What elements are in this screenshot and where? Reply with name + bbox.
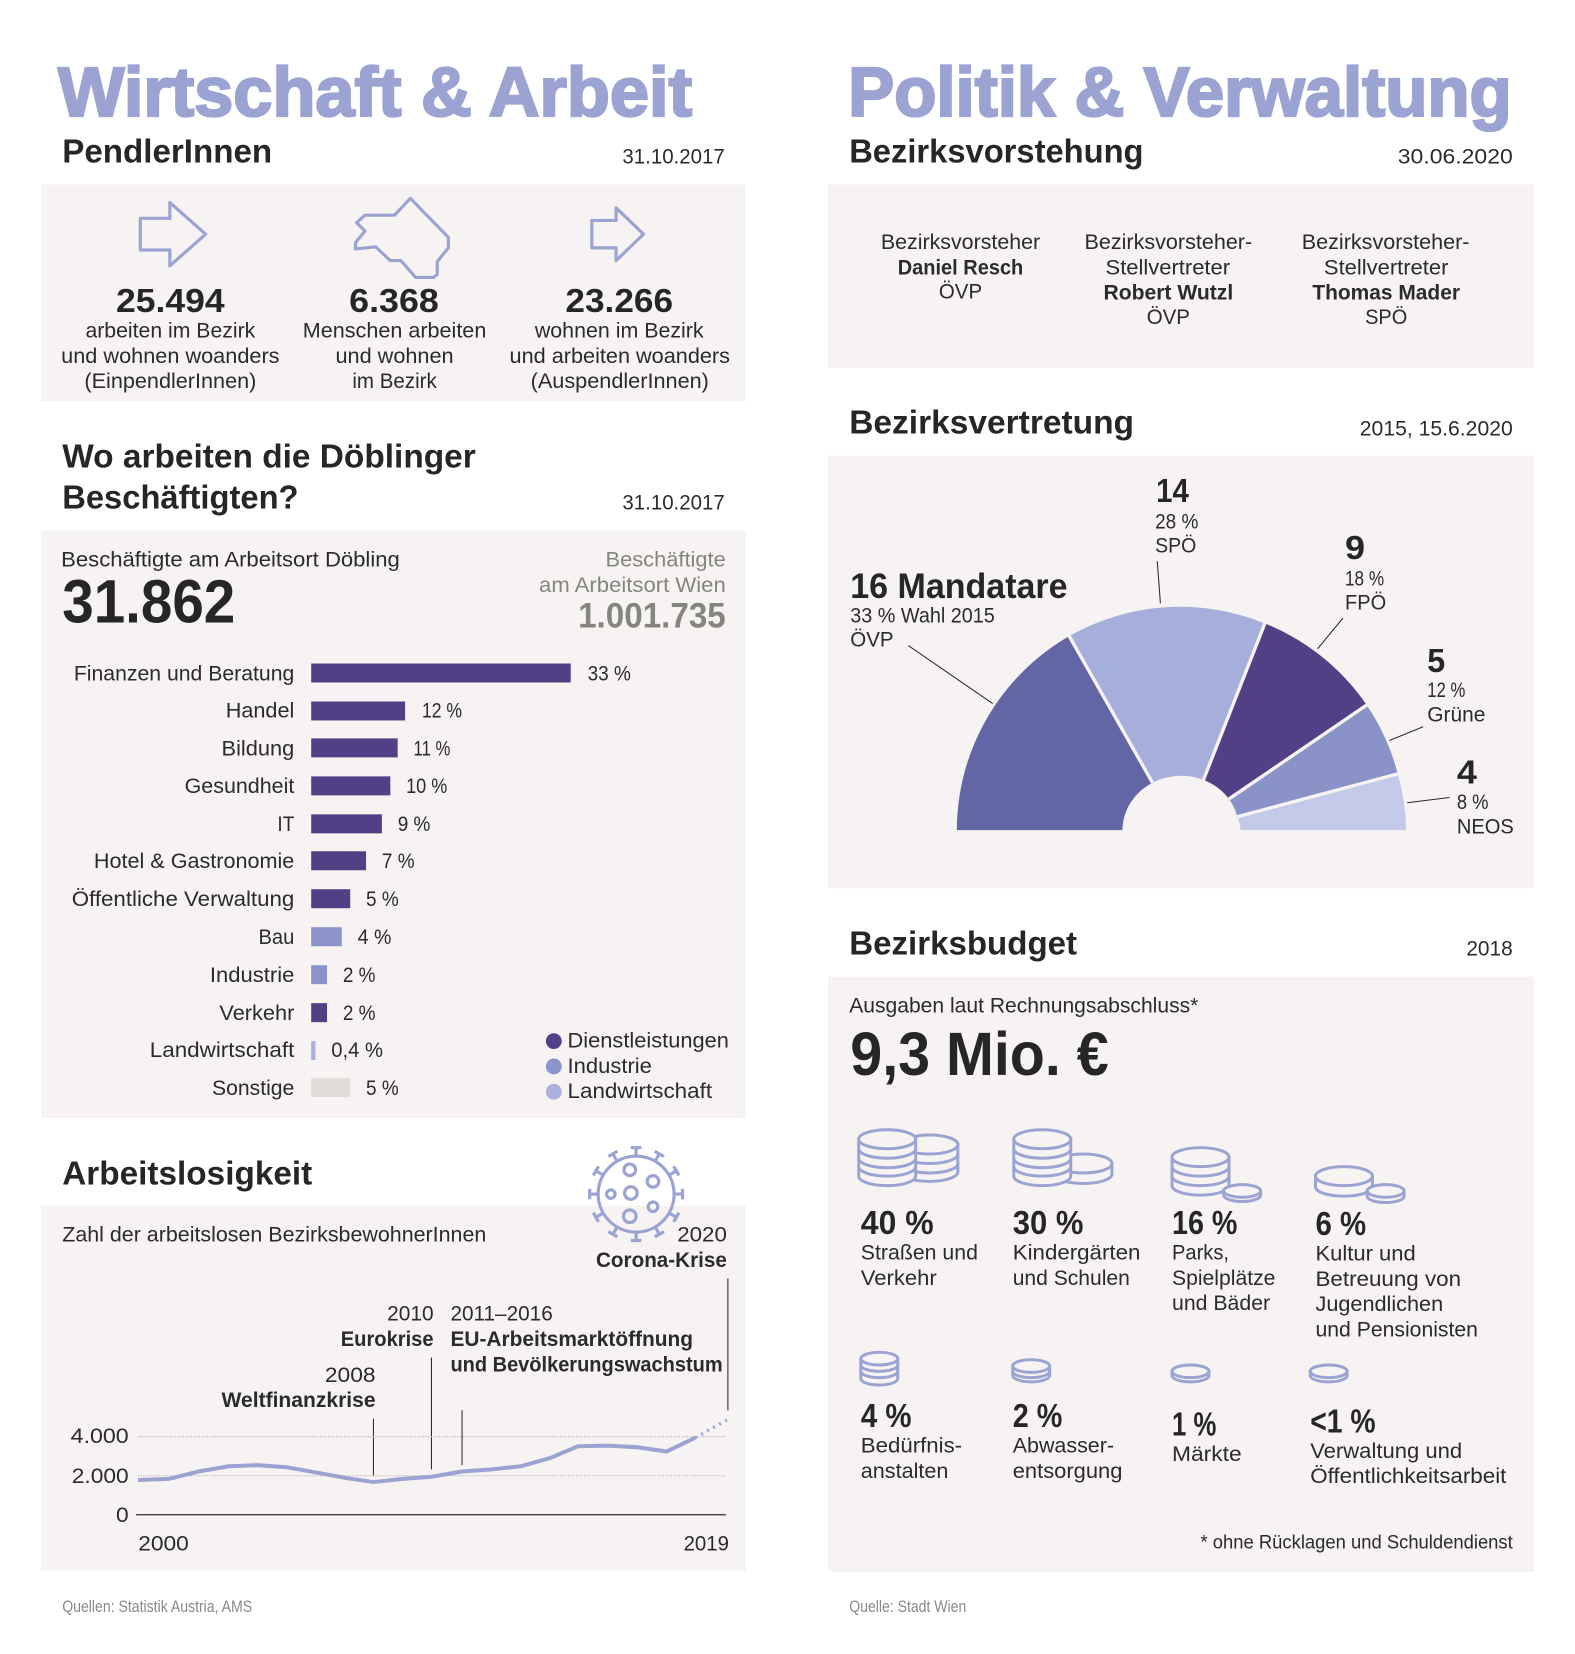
person: Daniel Resch: Daniel Resch [898,254,1023,279]
date: Beschäftigte: 31.10.2017 [622,489,725,514]
stat: Einpendler: arbeiten im Bezirk [85,318,255,343]
source: left: Quellen: Statistik Austria, AMS [62,1597,252,1616]
person: Thomas Mader: Thomas Mader [1312,280,1461,305]
item: 1%: Märkte [1172,1441,1242,1466]
item: 6% [1315,1167,1478,1341]
label: NEOS: NEOS [1457,813,1514,838]
item: 16%: Spielplätze [1172,1265,1275,1290]
source: right: Quelle: Stadt Wien [849,1597,966,1616]
panel: Arbeitslosigkeit [41,1206,746,1571]
bar chart: Branchen: 0,4 % [331,1037,383,1062]
annotation: Weltfinanzkrise: 2008 [325,1362,376,1387]
line chart: Arbeitslose: 2019 [684,1531,729,1556]
stat: im Bezirk: Menschen arbeiten [303,318,486,343]
label: FPÖ [1318,529,1386,649]
panel: Beschäftigte [41,531,746,1118]
date: Bezirksvertretung: 2015, 15.6.2020 [1360,416,1513,441]
label: FPÖ: 9 [1345,529,1365,567]
bar chart: Branchen: 11 % [414,735,450,760]
bar chart: Branchen: Verkehr [219,1000,294,1025]
person: Daniel Resch [881,229,1040,304]
label: ÖVP: 16 Mandatare [850,567,1068,606]
line chart: Arbeitslose: 4.000 [71,1423,129,1448]
icon: district outline [356,198,448,277]
item: 30%: und Schulen [1013,1265,1130,1290]
title: Wirtschaft & Arbeit: Wirtschaft & Arbeit [58,53,692,131]
title: Politik & Verwaltung: Politik & Verwaltung [848,53,1512,131]
heading: Bezirksvorstehung: Bezirksvorstehung [849,132,1144,170]
item: <1%: Verwaltung und [1310,1438,1462,1463]
stat: Einpendler [61,282,280,393]
item: 6%: Jugendlichen [1315,1291,1443,1316]
legend: Dienstleistungen [568,1027,729,1052]
annotation: EU-Arbeitsmarktöffnung: und Bevölkerungswachstum [450,1351,723,1376]
text: Ausgaben: Ausgaben laut Rechnungsabschluss* [849,993,1199,1018]
item: 4% [861,1352,962,1483]
icon: arrow into district [140,203,206,266]
item: 16%: und Bäder [1172,1290,1270,1315]
text: Ausgaben [849,993,1199,1088]
item: 4%: anstalten [861,1458,948,1483]
panel: Bezirksbudget [828,977,1534,1572]
item: <1%: Öffentlichkeitsarbeit [1310,1463,1506,1488]
legend: Industrie [568,1053,652,1078]
panel: PendlerInnen [41,185,746,401]
text: Beschäftigte Wien: Beschäftigte [606,546,726,571]
item: 2%: 2 % [1013,1397,1062,1435]
label: NEOS [1407,754,1514,838]
label: Grüne: 5 [1427,642,1445,680]
item: 30%: 30 % [1013,1204,1083,1242]
annotation: Corona: 2020 [677,1222,727,1247]
item: 30% [1013,1130,1140,1290]
label: NEOS: 4 [1457,754,1477,792]
heading: Wo arbeiten die Döblinger Beschäftigten?: Beschäftigten? [62,478,299,516]
label: SPÖ [1155,472,1198,603]
stat: im Bezirk: und wohnen [335,343,454,368]
person: Robert Wutzl: Stellvertreter [1106,254,1230,279]
item: <1% [1310,1365,1506,1488]
stat: Auspendler: 23.266 [565,282,673,320]
line chart: Arbeitslose: 2000 [138,1531,189,1556]
date: PendlerInnen: 31.10.2017 [622,144,725,169]
annotation: EU-Arbeitsmarktöffnung [450,1301,723,1465]
bar chart: Branchen: Finanzen und Beratung [74,660,294,685]
label: Grüne [1389,642,1485,741]
person: Thomas Mader [1302,229,1470,329]
line chart: Arbeitslose [71,1419,729,1556]
bar chart: Branchen: Bau [258,924,294,949]
label: FPÖ: 18 % [1345,565,1384,590]
item: 2% [1013,1360,1122,1483]
annotation: Corona: Corona-Krise [596,1247,727,1272]
bar chart: Branchen: Landwirtschaft [150,1037,294,1062]
item: 16% [1172,1148,1275,1315]
bar chart: Branchen: 2 % [343,1000,376,1025]
annotation: Weltfinanzkrise: Weltfinanzkrise [222,1387,376,1412]
heading: Bezirksvertretung: Bezirksvertretung [849,404,1134,442]
item: <1%: <1 % [1310,1402,1376,1440]
bar chart: Branchen: 5 % [366,886,399,911]
label: SPÖ: 28 % [1155,508,1198,533]
stat: Einpendler: und wohnen woanders [61,343,280,368]
stat: Auspendler [510,282,730,393]
stat: Einpendler: (EinpendlerInnen) [84,368,256,393]
bar chart: Branchen: Industrie [210,962,294,987]
stat: Einpendler: 25.494 [116,282,225,320]
label: NEOS: 8 % [1457,789,1488,814]
person: Robert Wutzl: Bezirksvorsteher- [1084,229,1252,254]
item: 2%: Abwasser- [1013,1433,1114,1458]
person: Daniel Resch: ÖVP [939,279,982,304]
bar chart: Branchen: IT [277,811,294,836]
stat: im Bezirk [303,282,486,393]
item: 6%: und Pensionisten [1315,1316,1478,1341]
legend [546,1027,729,1103]
bar chart: Branchen: 33 % [588,660,631,685]
icon: virus [590,1148,683,1240]
bar chart: Branchen: Öffentliche Verwaltung [72,886,294,911]
stat: im Bezirk: 6.368 [349,282,439,320]
text: Beschäftigte Wien: am Arbeitsort Wien [539,572,726,597]
annotation: Corona [596,1222,728,1410]
bar chart: Branchen: 9 % [398,811,430,836]
date: Bezirksbudget: 2018 [1466,936,1513,961]
line chart: Arbeitslose: 2.000 [72,1463,129,1488]
heading: Bezirksbudget: Bezirksbudget [849,925,1077,963]
person: Robert Wutzl: Robert Wutzl [1103,280,1233,305]
item: 1% [1172,1365,1242,1466]
item: 30%: Kindergärten [1013,1239,1140,1264]
stat: Auspendler: wohnen im Bezirk [534,318,704,343]
date: Bezirksvorstehung: 30.06.2020 [1398,144,1513,169]
bar chart: Branchen: Sonstige [212,1075,294,1100]
bar chart: Branchen: 12 % [422,697,462,722]
person: Thomas Mader: SPÖ [1365,304,1407,329]
bar chart: Branchen: 7 % [382,848,415,873]
item: 4%: Bedürfnis- [861,1433,962,1458]
bar chart: Branchen [72,660,631,1100]
text: Beschäftigte Döbling: 31.862 [62,567,235,635]
bar chart: Branchen: Gesundheit [185,773,294,798]
heading: Arbeitslosigkeit: Arbeitslosigkeit [62,1155,312,1193]
annotation: Weltfinanzkrise [222,1362,376,1476]
text: Beschäftigte Wien: 1.001.735 [578,597,726,636]
label: SPÖ: 14 [1156,472,1189,510]
heading: PendlerInnen: PendlerInnen [62,132,272,170]
label: Grüne: 12 % [1427,677,1465,702]
stat: Auspendler: und arbeiten woanders [510,343,730,368]
person: Robert Wutzl [1084,229,1252,329]
item: 6%: 6 % [1315,1205,1366,1243]
bar chart: Branchen: 5 % [366,1075,399,1100]
text: Beschäftigte Wien [539,546,726,636]
item: 40% [859,1130,978,1290]
label: ÖVP: 33 % Wahl 2015 [850,602,995,627]
item: 6%: Kultur und [1315,1241,1416,1266]
stat: Auspendler: (AuspendlerInnen) [531,368,709,393]
annotation: EU-Arbeitsmarktöffnung: EU-Arbeitsmarktöffnung [450,1326,693,1351]
bar chart: Branchen: Hotel & Gastronomie [94,848,294,873]
item: 2%: entsorgung [1013,1458,1122,1483]
item: 40%: Straßen und [861,1239,978,1264]
person: Robert Wutzl: ÖVP [1147,304,1190,329]
stat: im Bezirk: im Bezirk [352,368,437,393]
text: Ausgaben: 9,3 Mio. € [850,1020,1109,1088]
heading: Wo arbeiten die Döblinger Beschäftigten? [62,437,476,516]
icon: arrow out of district [592,208,644,261]
line chart: Arbeitslose: 0 [116,1502,129,1527]
text: Beschäftigte Döbling [61,546,400,635]
item: 40%: Verkehr [861,1265,937,1290]
bar chart: Branchen: 2 % [343,962,376,987]
legend: Landwirtschaft [568,1078,712,1103]
subtitle: Zahl der arbeitslosen BezirksbewohnerInnen [62,1222,486,1247]
panel: Bezirksvorstehung [828,185,1534,368]
annotation: EU-Arbeitsmarktöffnung: 2011–2016 [450,1301,553,1326]
label: SPÖ: SPÖ [1155,533,1196,558]
footnote: * ohne Rücklagen und Schuldendienst [1201,1533,1513,1554]
heading: Wo arbeiten die Döblinger Beschäftigten?: Wo arbeiten die Döblinger [62,437,476,475]
label: ÖVP [850,567,1068,704]
item: 40%: 40 % [861,1204,934,1242]
bar chart: Branchen: 10 % [406,773,447,798]
item: 16%: Parks, [1172,1239,1229,1264]
person: Thomas Mader: Bezirksvorsteher- [1302,229,1470,254]
label: Grüne: Grüne [1427,702,1485,727]
bar chart: Branchen: 4 % [358,924,391,949]
label: ÖVP: ÖVP [850,627,894,652]
chart: semicircle seats [957,607,1406,830]
item: 6%: Betreuung von [1315,1266,1461,1291]
bar chart: Branchen: Bildung [222,735,294,760]
annotation: Eurokrise: Eurokrise [341,1326,434,1351]
person: Thomas Mader: Stellvertreter [1324,254,1448,279]
item: 1%: 1 % [1172,1406,1216,1444]
bar chart: Branchen: Handel [226,697,294,722]
item: 4%: 4 % [861,1397,911,1435]
annotation: Eurokrise [341,1301,434,1469]
person: Daniel Resch: Bezirksvorsteher [881,229,1040,254]
label: FPÖ: FPÖ [1345,590,1386,615]
text: Beschäftigte Döbling: Beschäftigte am Arbeitsort Döbling [61,546,400,571]
item: 16%: 16 % [1172,1204,1237,1242]
panel: Bezirksvertretung [828,456,1534,888]
annotation: Eurokrise: 2010 [387,1301,434,1326]
